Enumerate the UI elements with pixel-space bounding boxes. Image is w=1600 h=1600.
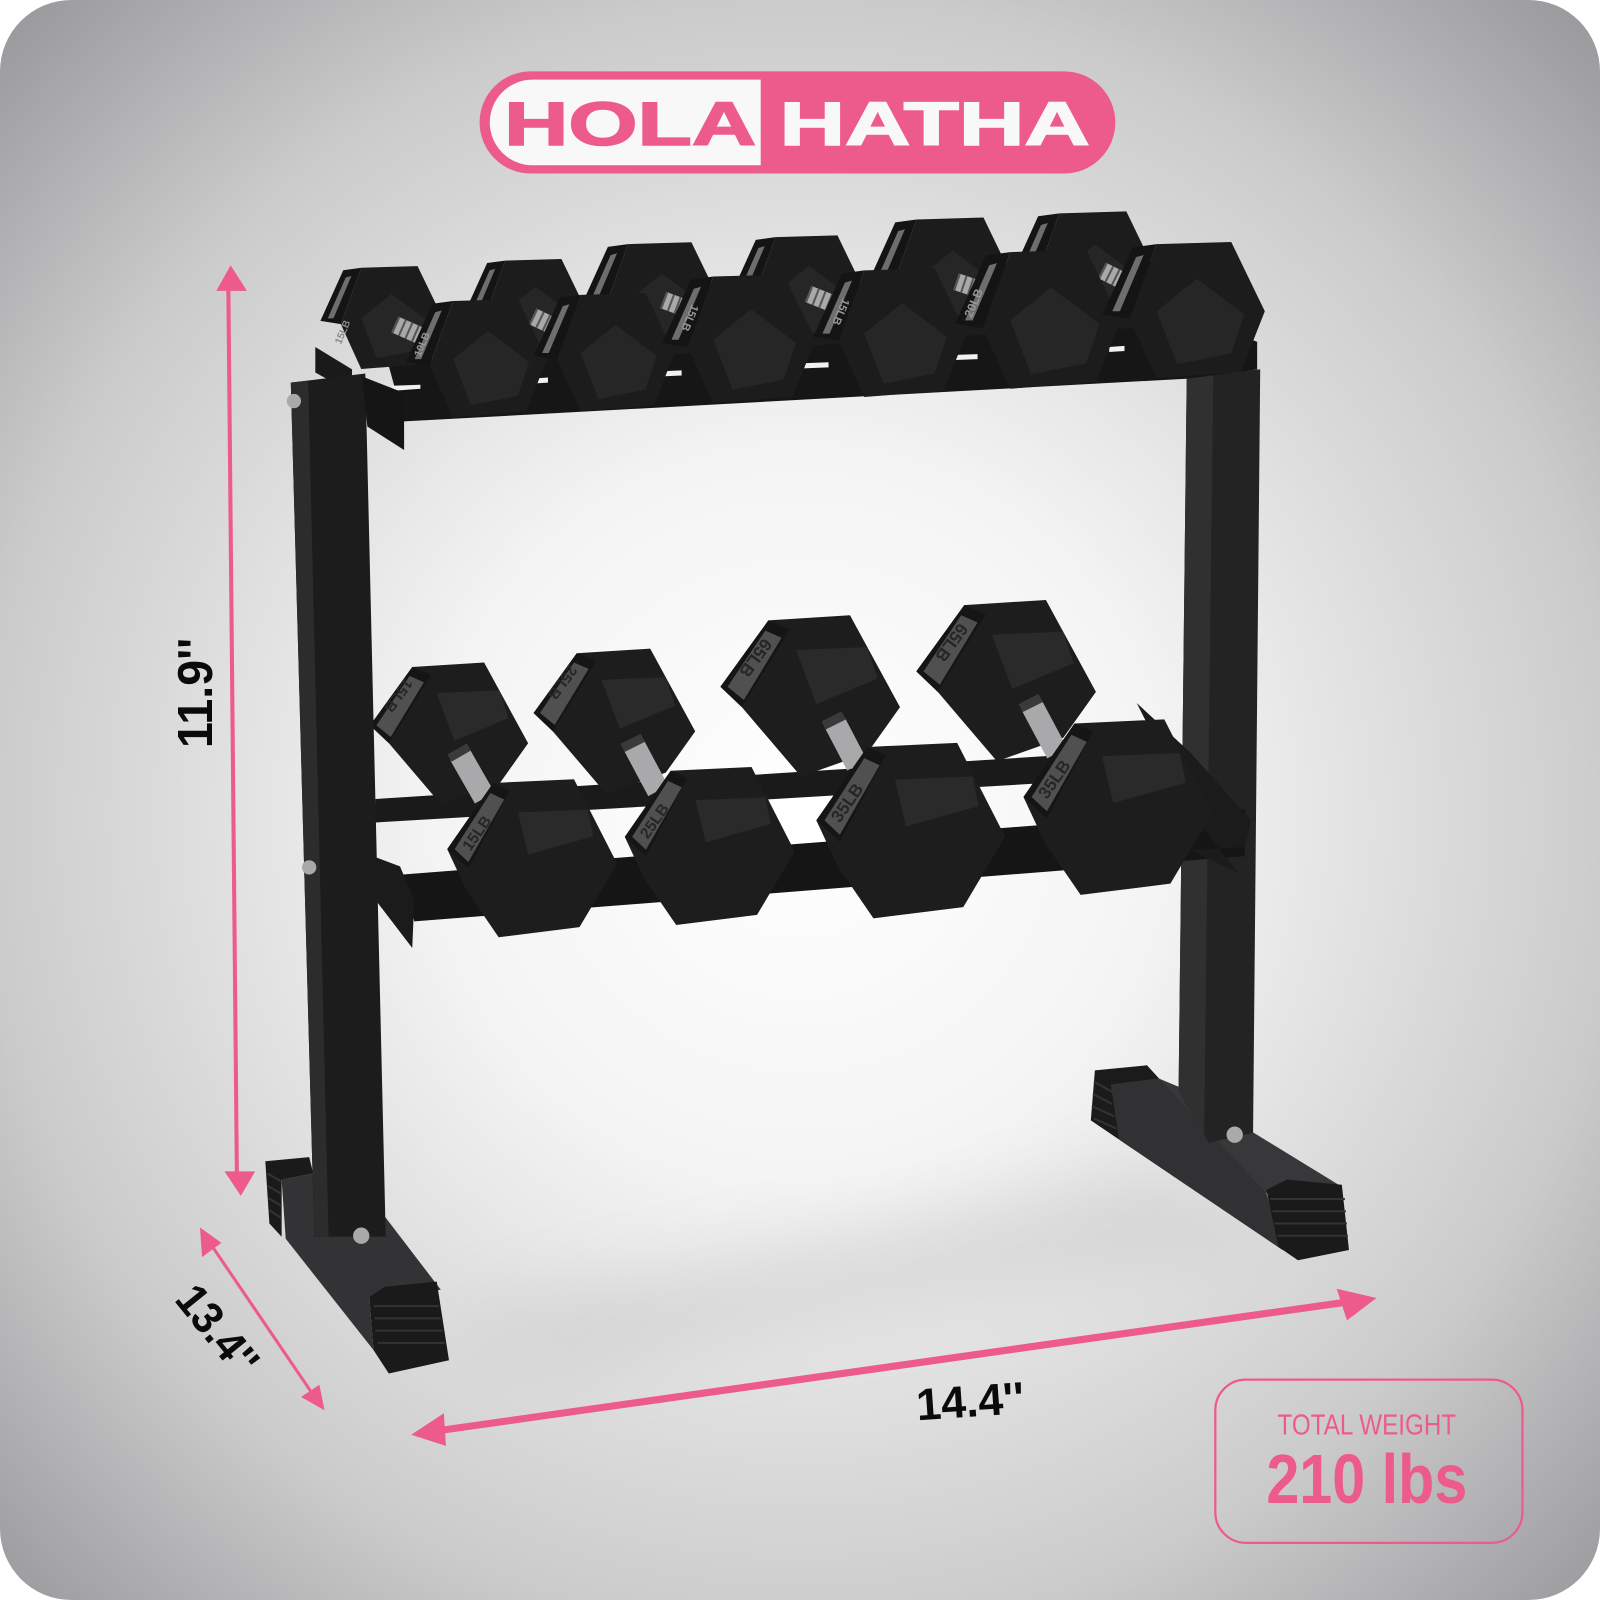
arrow: height [216,265,255,1196]
top row dumbbells: front heads: 10LB [413,331,433,358]
rack bolts [287,394,369,1244]
label: width 14.4: 14.4'' [914,1372,1026,1430]
lower row dumbbells: front heads: 15LB [460,813,495,854]
arrow: width [411,1289,1377,1446]
lower row dumbbells: front heads [447,719,1212,937]
callout: total weight [1215,1380,1522,1543]
dumbbell rack [265,211,1349,1373]
top row dumbbells: front heads: 20LB [962,286,986,319]
callout: total weight: 210 lbs [1266,1440,1467,1518]
top shelf [315,316,1257,421]
arrow: depth [200,1228,324,1410]
logo: HolaHatha: HOLA [504,90,756,158]
lower row dumbbells: front heads: 25LB [637,801,673,842]
lower shelf front bar [403,809,1245,921]
right foot [1091,1065,1349,1260]
right post [1179,369,1260,1143]
top row dumbbells: back heads [320,211,1156,369]
lower row dumbbells: front heads: 35LB [827,780,867,826]
lower shelf back bar [376,748,1173,822]
left foot [265,1157,449,1373]
top row dumbbells: front heads: 15LB [678,303,700,333]
left top bracket [362,377,404,450]
logo: HolaHatha: HATHA [780,90,1090,158]
floor shadow [429,1173,1286,1367]
lower row dumbbells: back heads: 65LB [931,620,972,666]
top row dumbbells: back heads: 15LB [333,319,353,346]
lower row handles [457,699,1057,798]
top row handles [395,270,1124,337]
label: height 11.9: 11.9'' [169,638,223,748]
top row dumbbells: front heads: 15LB [829,297,851,327]
logo: HolaHatha [480,71,1115,173]
lower row dumbbells: back heads: 15LB [380,675,416,715]
top row dumbbells: front heads [406,242,1265,417]
lower row dumbbells: front heads: 35LB [1034,756,1075,802]
lower row dumbbells: back heads [370,600,1096,804]
lower row dumbbells: back heads: 65LB [735,635,776,681]
lower row dumbbells: back heads: 25LB [544,662,580,702]
lower shelf brackets [376,703,1251,948]
label: depth 13.4: 13.4'' [166,1274,270,1386]
callout: total weight: TOTAL WEIGHT [1278,1410,1456,1442]
left post [291,373,386,1237]
